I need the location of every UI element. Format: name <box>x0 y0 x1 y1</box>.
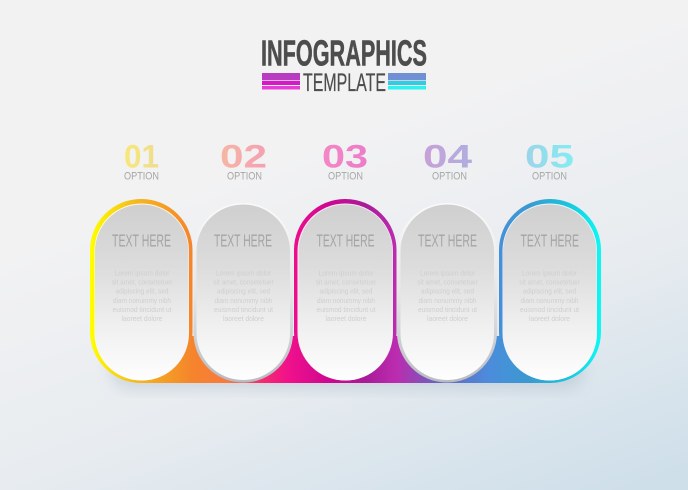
option 01 label: 01 <box>124 138 159 174</box>
option 05 label: 05 <box>525 138 574 174</box>
panel 5 <box>502 204 597 380</box>
panel 5: TEXT HERE <box>520 230 579 250</box>
option 04 label: 04 <box>423 138 472 174</box>
body text 3 <box>316 268 377 323</box>
option 04 label <box>423 138 472 182</box>
body text 2: laoreet dolore <box>223 314 264 323</box>
title <box>261 32 427 97</box>
body text 1: euismod tincidunt ut <box>112 305 172 314</box>
option 01 label: OPTION <box>124 170 159 182</box>
body text 1 <box>112 268 173 323</box>
panel 1: TEXT HERE <box>112 230 171 250</box>
body text 3: diam nonummy nibh <box>317 296 375 305</box>
panel 4 <box>397 203 497 382</box>
body text 2: Lorem ipsum dolor <box>216 268 271 278</box>
body text 4: Lorem ipsum dolor <box>420 268 475 278</box>
body text 1: adipiscing elit, sed <box>116 287 168 296</box>
body text 5: euismod tincidunt ut <box>520 305 580 314</box>
body text 4: euismod tincidunt ut <box>418 305 478 314</box>
body text 3: euismod tincidunt ut <box>316 305 376 314</box>
panel 1 <box>94 204 189 380</box>
option 03 label: OPTION <box>328 170 363 182</box>
body text 4 <box>417 268 478 323</box>
body text 5: sit amet, consetetuer <box>519 278 580 286</box>
body text 2: sit amet, consetetuer <box>213 278 274 286</box>
subtitle: template: TEMPLATE <box>303 69 386 97</box>
body text 5 <box>519 268 580 323</box>
option 04 label: OPTION <box>432 170 467 182</box>
body text 5: diam nonummy nibh <box>520 296 578 305</box>
option 03 label: 03 <box>322 138 368 174</box>
body text 3: adipiscing elit, sed <box>320 287 372 296</box>
body text 5: laoreet dolore <box>529 314 570 323</box>
option 02 label: 02 <box>220 138 267 174</box>
body text 4: adipiscing elit, sed <box>421 287 474 296</box>
option 02 label: OPTION <box>227 170 262 182</box>
body text 1: sit amet, consetetuer <box>112 278 173 286</box>
body text 4: laoreet dolore <box>427 314 468 323</box>
panel 2: TEXT HERE <box>214 230 272 250</box>
option 03 label <box>322 138 368 182</box>
body text 2: diam nonummy nibh <box>214 296 272 305</box>
body text 4: diam nonummy nibh <box>418 296 476 305</box>
body text 5: adipiscing elit, sed <box>523 287 576 296</box>
body text 3: laoreet dolore <box>326 314 366 323</box>
option 02 label <box>220 138 267 182</box>
body text 2: euismod tincidunt ut <box>214 305 274 314</box>
panel 3 <box>298 204 393 380</box>
body text 2: adipiscing elit, sed <box>217 287 270 296</box>
title: INFOGRAPHICS <box>261 32 427 74</box>
body text 1: laoreet dolore <box>122 314 162 323</box>
option 05 label: OPTION <box>532 170 567 182</box>
soft shadow <box>110 350 585 390</box>
panel 3: TEXT HERE <box>316 230 374 250</box>
panel 2 <box>194 203 293 382</box>
option 05 label <box>525 138 574 182</box>
body text 3: Lorem ipsum dolor <box>318 268 374 278</box>
panel 4: TEXT HERE <box>418 230 477 250</box>
body text 2 <box>213 268 274 323</box>
body text 1: diam nonummy nibh <box>113 296 171 305</box>
rainbow ribbon <box>90 199 601 383</box>
body text 4: sit amet, consetetuer <box>417 278 478 286</box>
body text 3: sit amet, consetetuer <box>316 278 377 286</box>
body text 1: Lorem ipsum dolor <box>114 268 170 278</box>
body text 5: Lorem ipsum dolor <box>522 268 577 278</box>
